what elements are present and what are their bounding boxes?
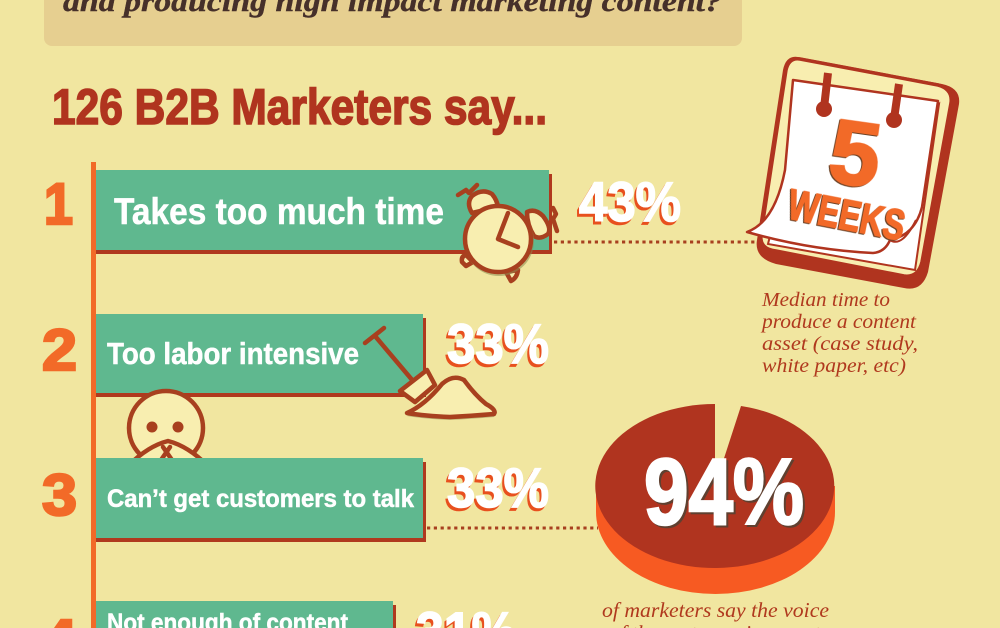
- bar 4: [96, 601, 393, 628]
- bar 1 shadow: [96, 174, 552, 254]
- bar 3: [96, 458, 423, 538]
- bar 1: [96, 170, 549, 250]
- calendar caption: produce a content: [760, 312, 917, 333]
- bar 2: [96, 314, 423, 393]
- icon: calendar: [747, 57, 959, 289]
- pie side: [596, 486, 835, 594]
- icon: face covering mouth: [128, 391, 208, 467]
- timeline vertical line: [91, 162, 96, 628]
- label 1: Takes too much time: [114, 191, 444, 232]
- pie value: 94%: [644, 439, 804, 544]
- dotted connector 1: [554, 240, 757, 244]
- pie chart: [595, 404, 835, 594]
- icon: alarm clock: [458, 185, 557, 281]
- calendar frame: [761, 59, 951, 276]
- calendar caption: [760, 290, 918, 377]
- percent 33: 33%: [447, 312, 549, 375]
- calendar caption: white paper, etc): [762, 356, 906, 377]
- heading: 126 B2B Marketers say...: [52, 79, 547, 135]
- page: [747, 80, 938, 253]
- bar 2 shadow: [96, 318, 426, 397]
- item 3: [42, 456, 549, 542]
- calendar number: 5: [823, 101, 887, 207]
- bar 3 shadow: [96, 462, 426, 542]
- calendar rings: [824, 73, 899, 119]
- calendar caption: Median time to: [761, 290, 890, 311]
- item 2: [42, 312, 549, 397]
- page stack: [768, 104, 939, 270]
- calendar label: WEEKS: [784, 181, 909, 250]
- number 3: 3: [42, 463, 77, 528]
- icon: shovel and mound: [365, 328, 495, 420]
- dotted connector 3: [427, 526, 598, 530]
- calendar caption: asset (case study,: [762, 334, 918, 355]
- item 4: [42, 600, 516, 628]
- bar 4 shadow: [96, 605, 396, 628]
- label 3: Can’t get customers to talk: [107, 485, 414, 513]
- percent 43: 43%: [579, 170, 681, 233]
- percent 33: 33%: [447, 456, 549, 519]
- pie top: [595, 404, 834, 568]
- question banner: [44, 0, 742, 46]
- number 2: 2: [42, 318, 77, 383]
- number 1: 1: [44, 172, 73, 237]
- calendar frame shadow: [757, 57, 959, 289]
- label 2: Too labor intensive: [107, 336, 359, 371]
- item 1: [44, 170, 681, 254]
- pie caption: of marketers say the voice: [602, 598, 829, 622]
